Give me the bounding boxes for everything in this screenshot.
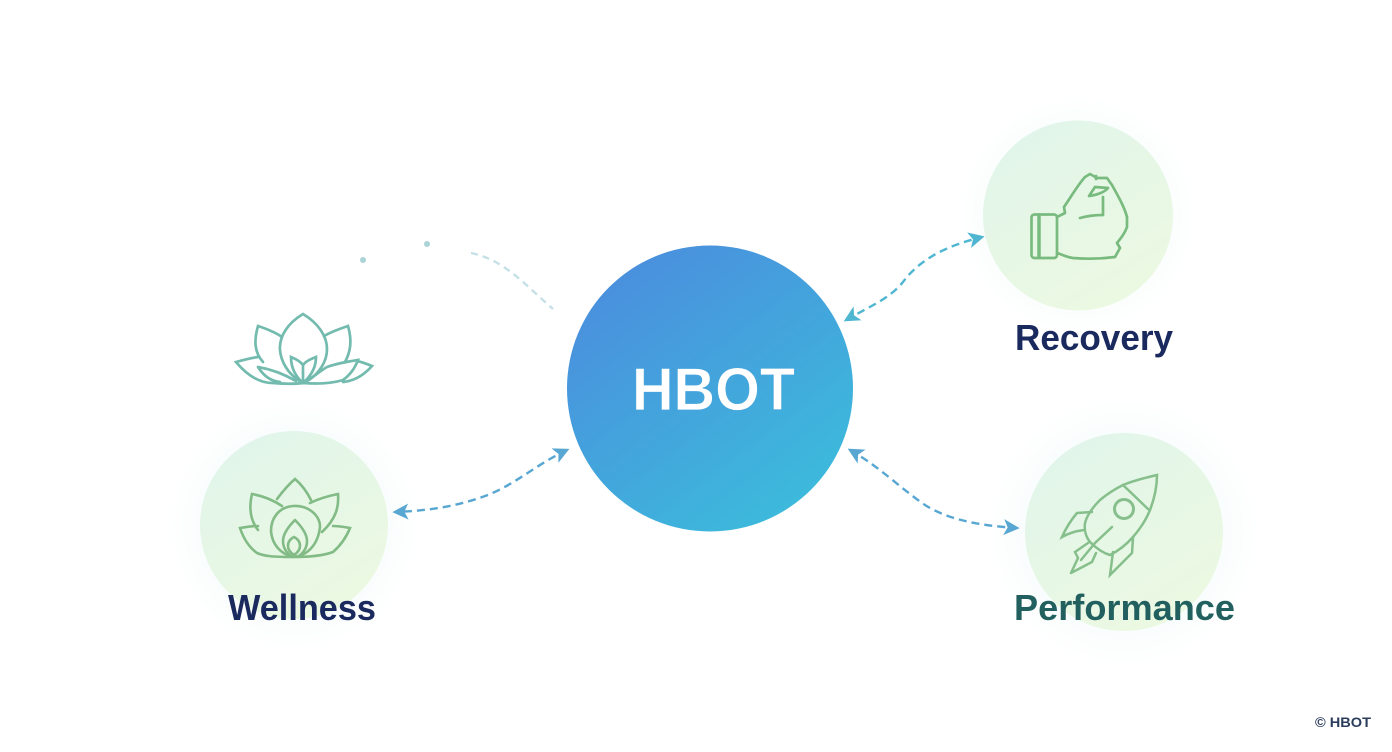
icon: upper teal lotus xyxy=(236,314,372,384)
arrow: HBOT to Performance xyxy=(850,450,1017,528)
node: Wellness xyxy=(200,431,388,628)
label: Performance: Performance xyxy=(1014,587,1235,628)
arrow: HBOT to Recovery xyxy=(846,237,982,320)
copyright mark: © HBOT xyxy=(1315,715,1372,730)
node: Recovery xyxy=(983,120,1173,358)
central circle: HBOT xyxy=(567,246,853,532)
arrow: HBOT to Wellness xyxy=(395,450,567,512)
label: Wellness: Wellness xyxy=(228,587,376,628)
circle: Performance background xyxy=(1025,433,1223,631)
circle: Recovery background xyxy=(983,120,1173,310)
icon: flexed arm fist xyxy=(1032,174,1127,259)
faded dots and dashed arc xyxy=(360,241,553,309)
icon: lotus with flame xyxy=(240,479,350,557)
circle: Wellness background xyxy=(200,431,388,619)
icon: rocket xyxy=(1062,475,1157,575)
heading: HBOT: HBOT xyxy=(632,356,795,423)
node: Performance xyxy=(1014,433,1235,631)
label: Recovery: Recovery xyxy=(1015,317,1173,358)
